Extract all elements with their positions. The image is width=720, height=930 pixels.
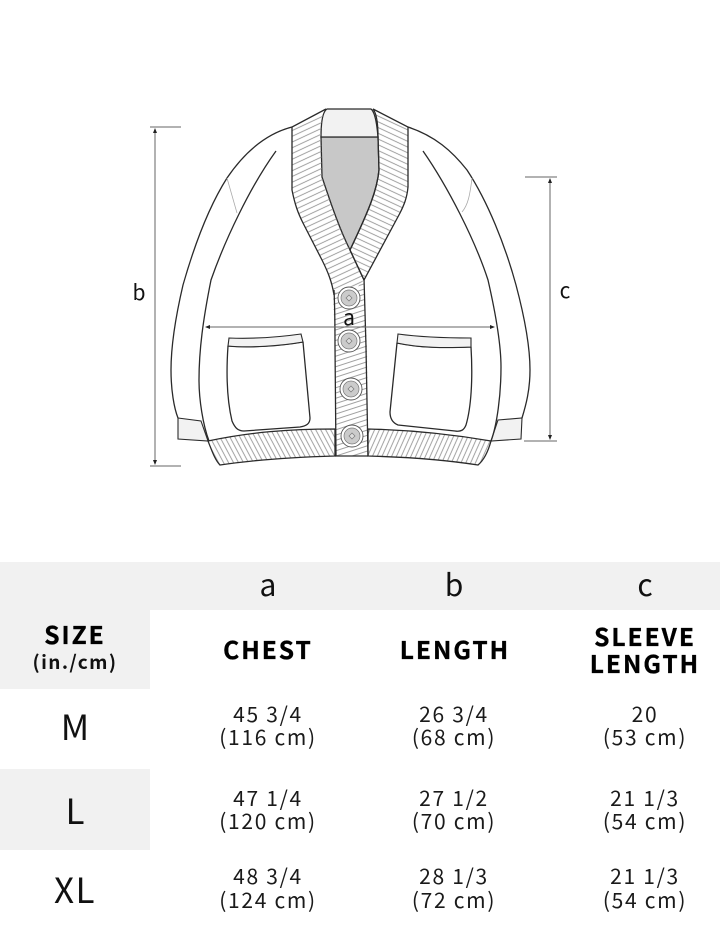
row M values: 20: [632, 699, 658, 729]
label a: a: [343, 302, 355, 332]
size labels: L: [65, 784, 85, 835]
left cuff: [178, 418, 208, 441]
dimension b: length arrow: [133, 127, 181, 466]
size table: [0, 561, 720, 915]
hem band right: [368, 429, 491, 465]
right armhole seam: [423, 151, 501, 441]
row XL values: (72 cm): [412, 885, 496, 915]
label c: c: [560, 275, 571, 305]
garment diagram: [171, 109, 530, 465]
right collar band: [350, 109, 408, 280]
column headings: LENGTH: [590, 646, 700, 681]
left armhole seam: [199, 151, 276, 441]
row L values: (120 cm): [219, 806, 317, 836]
row M values: 45 3/4: [233, 699, 303, 729]
right sleeve outline: [408, 127, 530, 418]
row L values: 27 1/2: [419, 783, 489, 813]
row XL values: [219, 861, 687, 915]
column headings: LENGTH: [400, 632, 510, 667]
header strip: [0, 562, 720, 610]
button 4: [341, 425, 363, 447]
size labels: M: [61, 700, 89, 751]
hem band left: [208, 429, 335, 465]
underarm creases: [227, 178, 472, 213]
column keys: [260, 561, 653, 605]
size labels: XL: [54, 863, 96, 914]
row XL values: 28 1/3: [419, 861, 489, 891]
hem bottom placket line: [335, 455, 368, 457]
right cuff: [491, 418, 522, 441]
buttons: [338, 287, 363, 447]
left pocket: [227, 334, 310, 431]
row M values: (116 cm): [219, 722, 317, 752]
size labels: [54, 700, 96, 914]
column headings: CHEST: [223, 632, 313, 667]
dimension a: chest arrow: [205, 302, 495, 332]
column keys: c: [637, 561, 653, 605]
row XL values: (124 cm): [219, 885, 317, 915]
size header cell: [0, 610, 150, 689]
back neck interior: [321, 137, 379, 250]
button 1: [338, 287, 360, 309]
column keys: a: [260, 561, 276, 605]
back collar: [321, 109, 378, 137]
row XL values: 21 1/3: [610, 861, 680, 891]
placket edges: [334, 278, 368, 456]
button 3: [340, 378, 362, 400]
row L values: 21 1/3: [610, 783, 680, 813]
row L values: 47 1/4: [233, 783, 303, 813]
row L values: (70 cm): [412, 806, 496, 836]
size header cell: SIZE: [44, 617, 106, 652]
row M values: [219, 699, 687, 752]
row XL values: (54 cm): [603, 885, 687, 915]
button 2: [338, 330, 360, 352]
button placket: [333, 280, 368, 456]
row L values: [219, 783, 687, 836]
column headings: [223, 619, 700, 681]
column keys: b: [445, 561, 463, 605]
size header cell: (in./cm): [33, 648, 117, 675]
column headings: SLEEVE: [594, 619, 696, 654]
row M values: (53 cm): [603, 722, 687, 752]
dimension c: sleeve length arrow: [524, 177, 571, 441]
left collar band: [292, 109, 364, 296]
row M values: 26 3/4: [419, 699, 489, 729]
row M values: (68 cm): [412, 722, 496, 752]
row XL values: 48 3/4: [233, 861, 303, 891]
L row highlight: [0, 769, 150, 850]
left sleeve outline: [171, 127, 292, 418]
label b: b: [133, 277, 145, 307]
right pocket: [390, 334, 472, 431]
row L values: (54 cm): [603, 806, 687, 836]
